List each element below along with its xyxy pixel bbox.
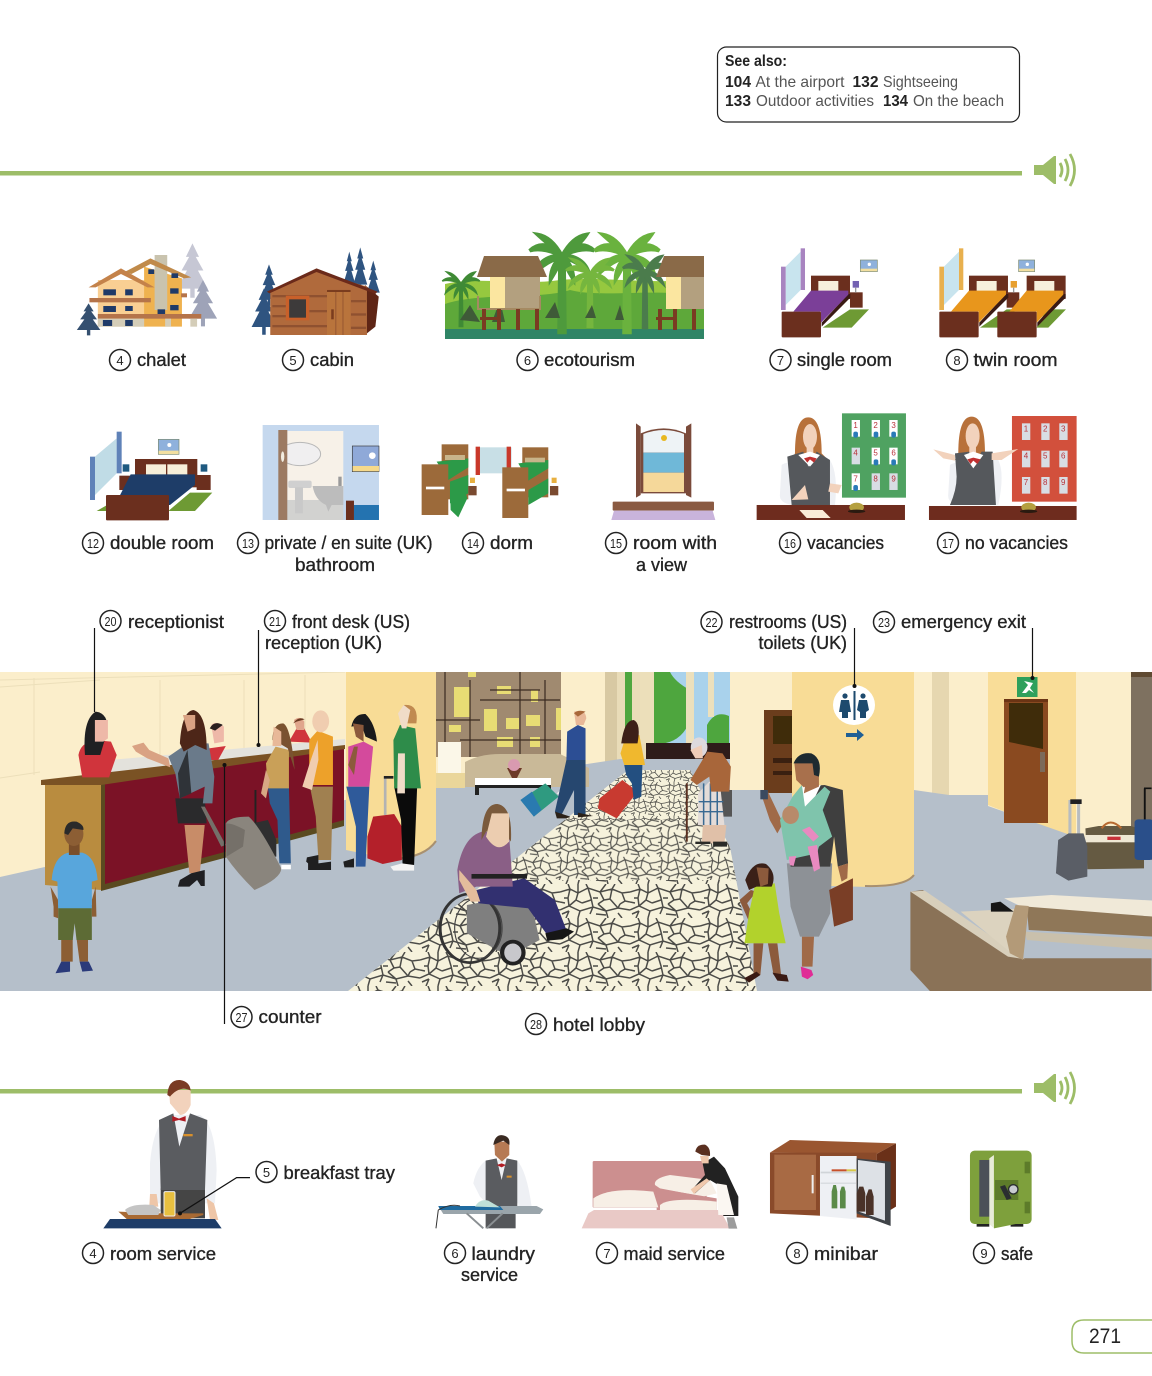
label: safe: 9 [980, 1246, 988, 1261]
label: laundry service: service [461, 1264, 518, 1285]
label: counter: counter [258, 1006, 322, 1027]
panel: hotel lobby scene [0, 672, 1152, 995]
label: ecotourism: 6 [524, 353, 531, 368]
panel: minibar [770, 1140, 896, 1264]
label: room with a view: 15 [610, 536, 622, 551]
label: front desk / reception: reception (UK) [265, 632, 382, 653]
leader line: counter [222, 763, 226, 1024]
label: dorm [462, 532, 533, 554]
icon: receptionist with key board: 4 [853, 449, 858, 458]
gray rolling bag [201, 790, 281, 890]
label: counter [231, 1006, 322, 1028]
leader line: restrooms [852, 628, 856, 688]
see also box: 134 [883, 93, 908, 110]
label: front desk / reception: 21 [269, 614, 281, 629]
label: restrooms / toilets: restrooms (US) [729, 611, 847, 632]
icon: receptionist with key board [757, 413, 906, 520]
label: hotel lobby: hotel lobby [553, 1014, 646, 1035]
label: dorm: 14 [467, 536, 479, 551]
girl in green dress [740, 863, 789, 983]
label: emergency exit: 23 [878, 615, 890, 630]
label: no vacancies: no vacancies [965, 532, 1068, 553]
see also box: On the beach [913, 93, 1004, 110]
icon: receptionist shrugging with full board: 8 [1043, 478, 1048, 487]
woman in pink shirt [343, 714, 377, 867]
icon: double room [90, 432, 212, 520]
label: private / en suite (UK) bathroom: 13 [242, 536, 254, 551]
icon: receptionist shrugging with full board: 9 [1061, 478, 1066, 487]
woman in tan shirt [261, 723, 295, 869]
icon: receptionist shrugging with full board: 1 [1024, 424, 1029, 433]
panel: cabin [252, 247, 380, 370]
label: vacancies: 16 [784, 536, 796, 551]
label: single room: 7 [777, 353, 784, 368]
icon: maid making bed [582, 1145, 738, 1229]
icon: receptionist with key board: 8 [873, 474, 878, 483]
panel: safe [970, 1151, 1033, 1264]
panel: private bathroom [238, 425, 432, 575]
label: room with a view [606, 532, 717, 575]
icon: audio speaker bottom [1034, 1072, 1074, 1104]
icon: receptionist with key board: 1 [853, 421, 858, 430]
woman with gray jacket [132, 710, 214, 887]
icon: receptionist shrugging with full board: 3 [1061, 424, 1066, 433]
label: emergency exit: emergency exit [901, 611, 1026, 632]
icon: safe [970, 1151, 1032, 1228]
people in back and front right [598, 720, 1152, 992]
icon: chalet [77, 243, 217, 335]
icon: receptionist with key board: 2 [873, 421, 878, 430]
icon: receptionist with key board: 5 [873, 449, 878, 458]
see also box: 132 [852, 74, 879, 91]
panel: single room [770, 248, 892, 370]
panel: double room [82, 432, 214, 554]
label: twin room: 8 [953, 353, 961, 368]
man in green shirt [390, 705, 421, 871]
icon: receptionist shrugging with full board: 4 [1024, 452, 1029, 461]
icon: receptionist shrugging with full board: 2 [1043, 424, 1048, 433]
label: ecotourism: ecotourism [544, 349, 635, 370]
elderly woman with cane [686, 737, 732, 847]
label: room with a view: room with [633, 532, 717, 553]
see also box: At the airport [756, 74, 845, 91]
panel: ecotourism [442, 234, 704, 370]
label: room with a view: a view [636, 554, 688, 575]
receptionist [78, 712, 117, 777]
label: front desk / reception [264, 610, 410, 653]
label: cabin [282, 349, 354, 370]
label: minibar [786, 1242, 878, 1264]
leader line: front desk dot [256, 743, 260, 747]
icon: receptionist shrugging with full board: 7 [1024, 478, 1029, 487]
label: receptionist: 20 [104, 614, 116, 629]
panel: room service [82, 1080, 396, 1264]
label: laundry service: laundry [472, 1243, 536, 1264]
woman in wheelchair [440, 804, 574, 964]
see also box: 104 [725, 74, 751, 91]
icon: receptionist with key board: 3 [891, 421, 896, 430]
carpet [340, 765, 760, 995]
icon: dorm bunk beds [422, 444, 558, 518]
lobby wall and architecture [0, 672, 1152, 877]
back receptionists [209, 718, 312, 760]
panel: twin room [939, 248, 1066, 370]
panel: laundry service [436, 1135, 543, 1285]
label: maid service: 7 [603, 1246, 611, 1261]
label: receptionist: receptionist [128, 611, 224, 632]
label: double room: 12 [87, 536, 99, 551]
woman with baby and briefcase [760, 753, 853, 979]
label: single room: single room [797, 349, 892, 370]
label: no vacancies: 17 [942, 536, 954, 551]
label: private / en suite (UK) bathroom [238, 532, 432, 575]
label: twin room: twin room [974, 349, 1058, 370]
icon: ecotourism jungle huts [442, 234, 704, 339]
icon: window with sea view [611, 423, 715, 520]
see also box: See also: [725, 53, 787, 70]
icon: twin room [939, 248, 1066, 337]
label: minibar: 8 [793, 1246, 801, 1261]
label: front desk / reception: front desk (US) [292, 611, 410, 632]
label: vacancies: vacancies [807, 532, 884, 553]
label: private / en suite (UK) bathroom: private / en suite (UK) [264, 532, 432, 553]
icon: receptionist with key board: 6 [891, 449, 896, 458]
people at the counter [51, 705, 593, 973]
label: chalet: chalet [137, 349, 186, 370]
icon: minibar [770, 1140, 896, 1226]
label: vacancies [780, 532, 884, 554]
panel: maid service [582, 1145, 738, 1264]
back door left [764, 710, 792, 793]
label: restrooms / toilets [701, 611, 847, 653]
leader line: front desk [258, 630, 260, 745]
man with green suitcase [520, 711, 593, 818]
label: room service: room service [110, 1243, 216, 1264]
icon: waiter with tray [103, 1080, 250, 1228]
label: room service: 4 [89, 1246, 97, 1261]
woman with red suitcase [598, 720, 645, 818]
emergency exit door [1004, 699, 1048, 823]
label: safe: safe [1001, 1243, 1033, 1264]
label: double room: double room [110, 532, 214, 553]
label: hotel lobby: 28 [530, 1017, 542, 1032]
suitcases right [1056, 788, 1152, 881]
see also box [718, 47, 1020, 122]
label: maid service: maid service [624, 1243, 725, 1264]
page number: 271 [1089, 1325, 1121, 1348]
restroom sign [833, 685, 875, 741]
boy [51, 821, 98, 973]
label: cabin: 5 [289, 353, 297, 368]
icon: bathroom [263, 425, 379, 520]
icon: audio speaker top [1034, 154, 1074, 186]
panel: vacancies [757, 413, 906, 554]
leader line: receptionist [94, 628, 96, 712]
label: counter: 27 [236, 1010, 248, 1025]
leader line: emergency exit [1030, 628, 1034, 680]
icon: cabin [252, 247, 380, 335]
see also box: 133 [725, 93, 751, 110]
label: cabin: cabin [310, 349, 354, 370]
label: minibar: minibar [814, 1243, 878, 1264]
icon: receptionist with key board: 7 [853, 474, 858, 483]
label: laundry service: 6 [451, 1246, 459, 1261]
panel: room with a view [606, 423, 717, 575]
label: breakfast tray: 5 [263, 1165, 270, 1180]
man in orange shirt [302, 710, 333, 870]
label: breakfast tray: breakfast tray [284, 1162, 396, 1183]
pillars [346, 672, 914, 887]
red suitcase [367, 776, 402, 864]
see also box: Sightseeing [883, 74, 958, 91]
icon: man ironing [436, 1135, 543, 1228]
label: restrooms / toilets: toilets (UK) [758, 632, 847, 653]
icon: receptionist shrugging with full board: 5 [1043, 452, 1048, 461]
label: private / en suite (UK) bathroom: bathroom [295, 554, 375, 575]
icon: receptionist shrugging with full board [929, 416, 1077, 520]
page number [1072, 1320, 1152, 1353]
floor [0, 759, 1152, 991]
panel: no vacancies [929, 416, 1077, 554]
counter [41, 739, 345, 891]
label: dorm: dorm [490, 532, 533, 553]
label: restrooms / toilets: 22 [706, 615, 718, 630]
icon: receptionist shrugging with full board: 6 [1061, 452, 1066, 461]
back lounge furniture [436, 742, 589, 795]
icon: receptionist with key board: 9 [891, 474, 896, 483]
see also box: Outdoor activities [756, 93, 874, 110]
icon: single room [781, 248, 877, 337]
label: chalet [110, 349, 186, 370]
emergency exit sign [1017, 677, 1038, 697]
label: chalet: 4 [116, 353, 124, 368]
lobby sofa [910, 890, 1152, 992]
panel: dorm [422, 444, 558, 554]
panel: chalet [77, 243, 217, 370]
label: safe [974, 1242, 1033, 1264]
label: laundry service [444, 1242, 536, 1285]
